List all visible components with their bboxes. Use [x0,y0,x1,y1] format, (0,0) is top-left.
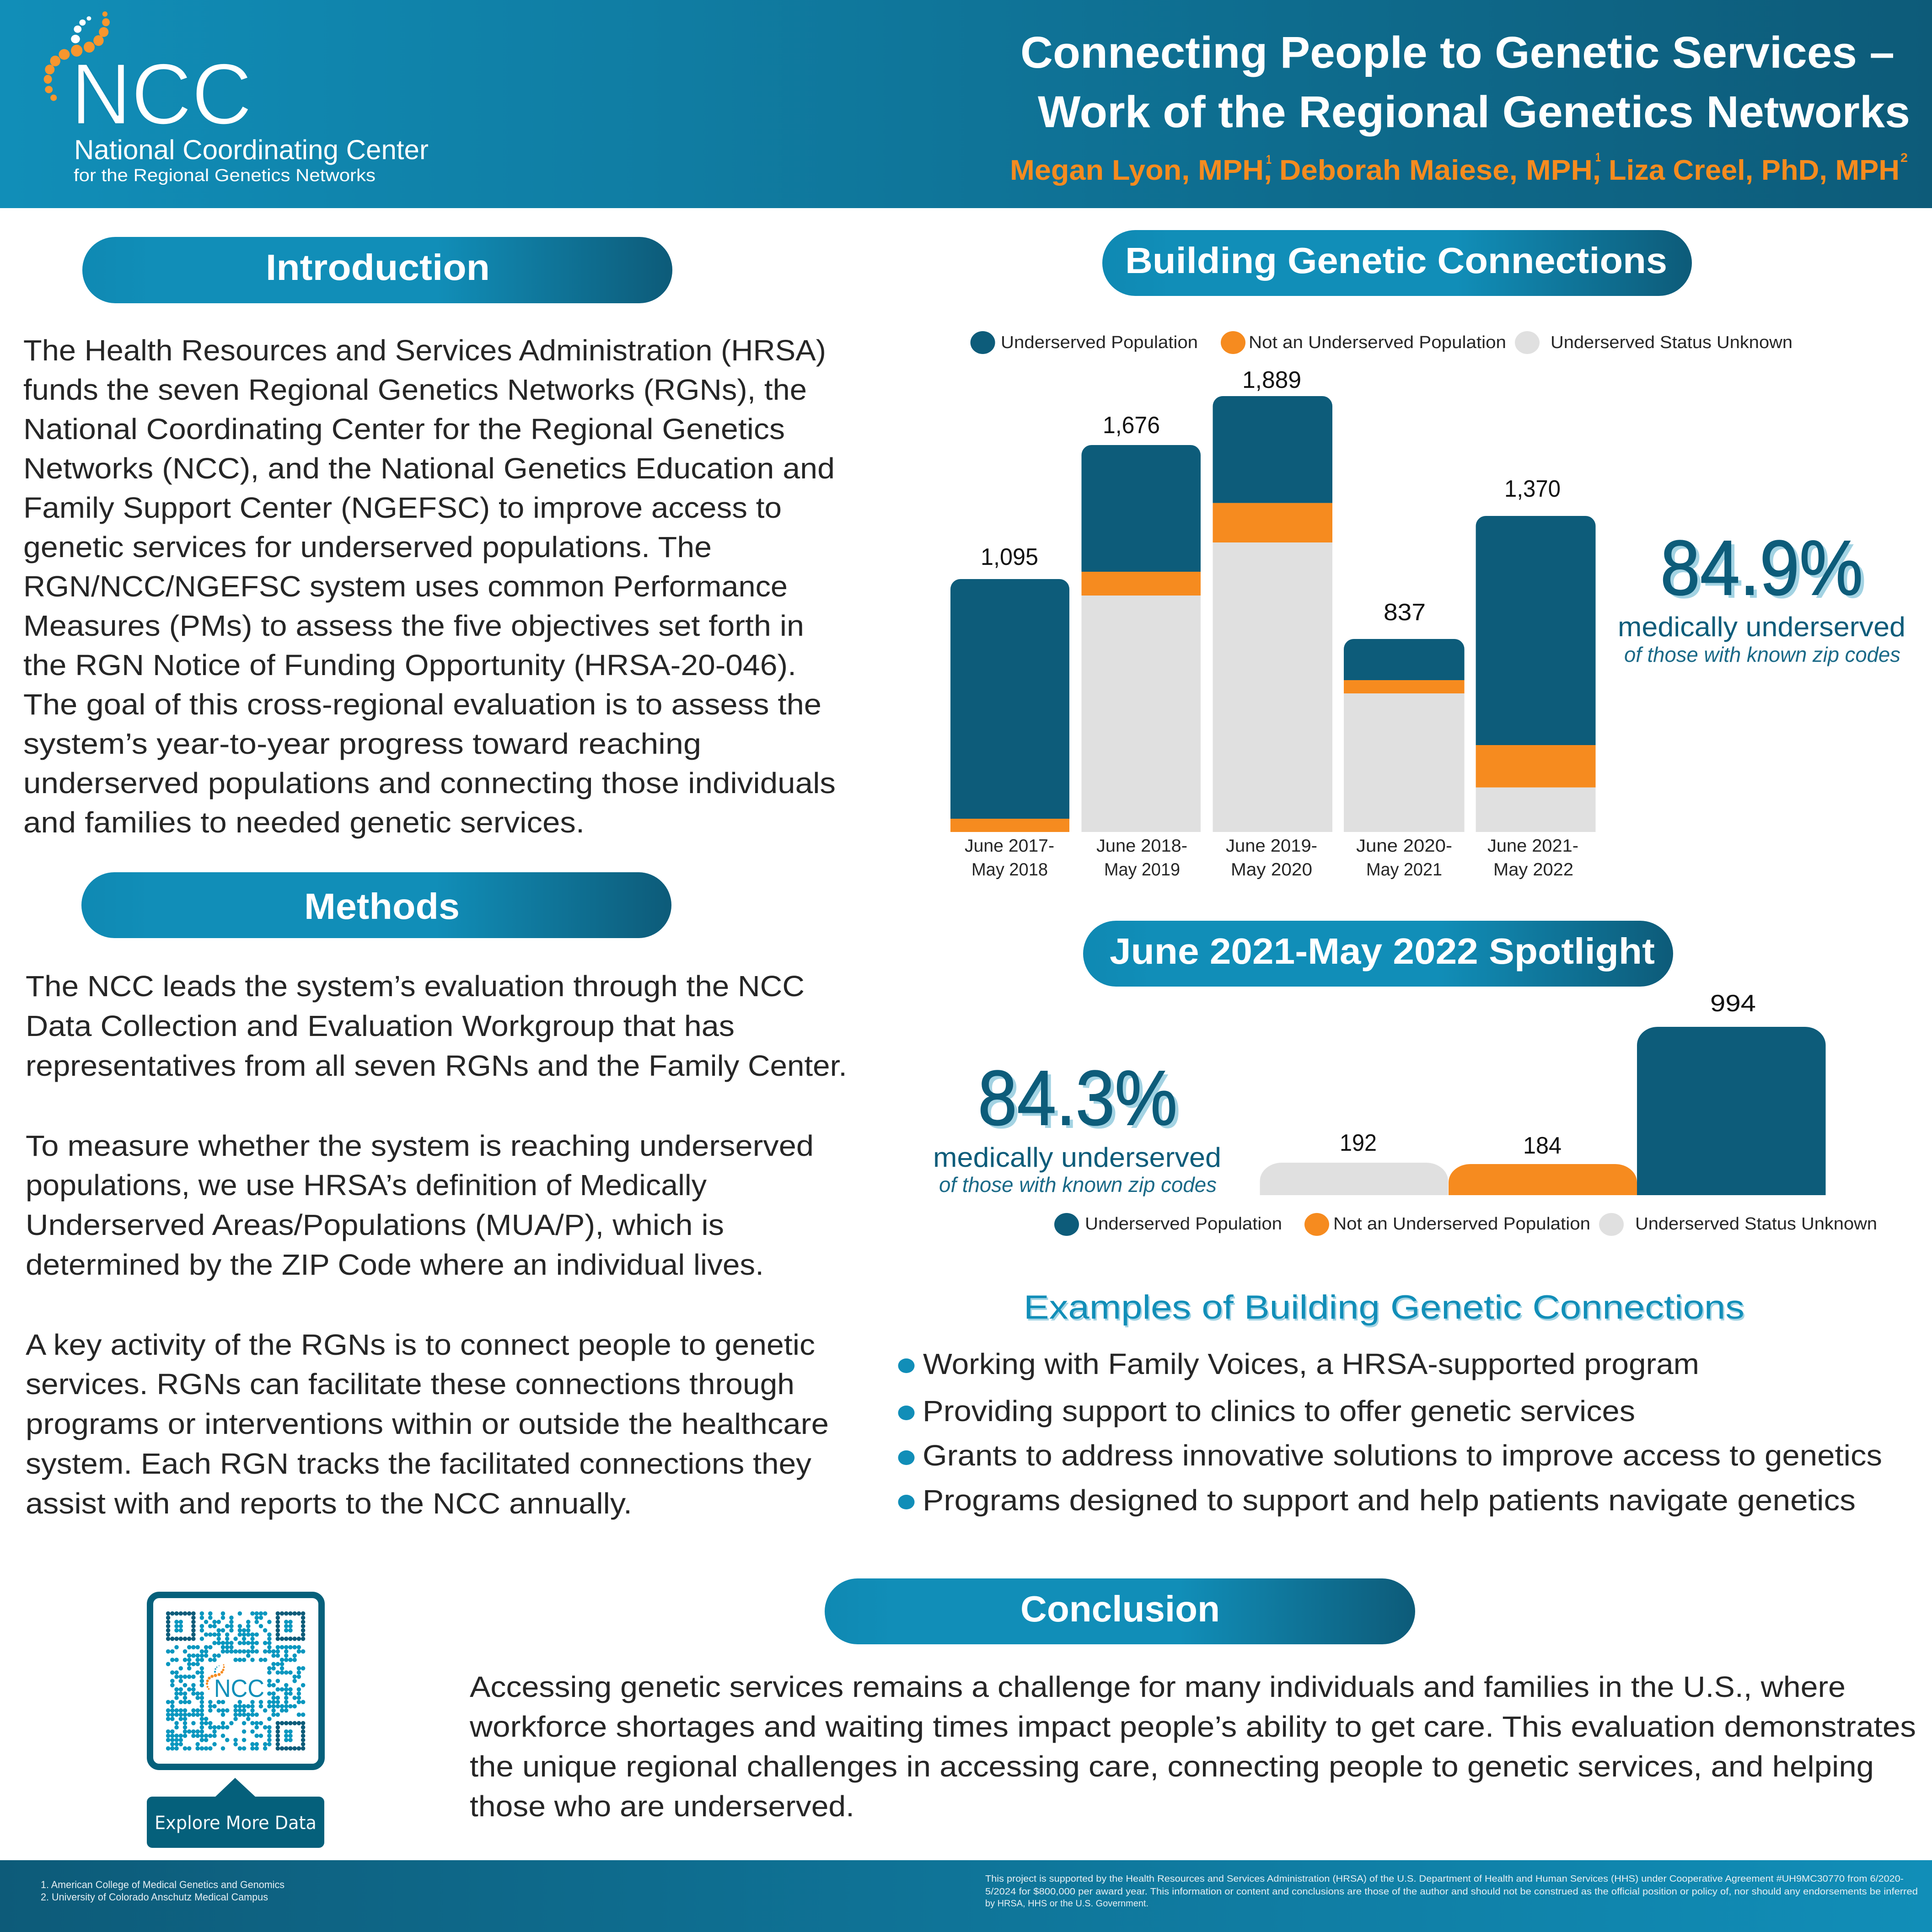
introduction text: Networks (NCC), and the National Genetics Education and [23,452,835,485]
conclusion text: Accessing genetic services remains a challenge for many individuals and families in the U.S., where [470,1670,1846,1703]
introduction heading [82,237,672,303]
conclusion text [469,1670,1916,1823]
spotlight legend: Underserved Status Unknown [1635,1214,1877,1234]
methods text: programs or interventions within or outside the healthcare [26,1407,829,1440]
callout: 84.3% medically underserved: medically underserved [933,1142,1221,1173]
authors: Liza Creel, PhD, MPH [1609,155,1900,186]
building genetic connections heading: Building Genetic Connections [1125,240,1667,281]
bar: June 2021-May 2022 [1476,476,1595,880]
authors: Deborah Maiese, MPH, [1279,155,1601,186]
spotlight legend: Not an Underserved Population [1333,1214,1590,1234]
QR frame [150,1595,322,1767]
callout: 84.9% medically underserved [1618,525,1905,666]
callout: 84.9% medically underserved: of those with known zip codes [1624,643,1900,666]
callout: Explore More Data: Explore More Data [155,1813,317,1834]
chart legend: Underserved Population [1001,333,1198,352]
spotlight heading: June 2021-May 2022 Spotlight [1110,931,1655,971]
QR centre logo [206,1664,264,1702]
methods heading [81,872,671,938]
introduction text: underserved populations and connecting those individuals [23,767,836,800]
introduction text: system’s year-to-year progress toward reaching [23,727,701,760]
conclusion heading: Conclusion [1020,1589,1220,1629]
bar: June 2017-May 2018: May 2018 [971,860,1048,880]
bar: June 2020-May 2021 [1344,599,1465,880]
introduction text: and families to needed genetic services. [23,806,585,839]
bar: June 2017-May 2018: 1,095 [981,544,1038,570]
conclusion text: the unique regional challenges in accessing care, connecting people to genetic services, and helping [470,1750,1874,1783]
conclusion text: workforce shortages and waiting times impact people’s ability to get care. This evaluation demonstrates [469,1710,1916,1743]
bar: June 2019-May 2020: 1,889 [1242,367,1301,393]
methods text: representatives from all seven RGNs and the Family Center. [26,1049,847,1082]
panel: introduction [23,237,836,839]
stacked bar chart [950,367,1595,880]
affiliations: 1. American College of Medical Genetics and Genomics [41,1879,284,1890]
methods text: To measure whether the system is reaching underserved [26,1129,814,1162]
bar: June 2019-May 2020: May 2020 [1231,860,1312,880]
introduction text: The goal of this cross-regional evaluation is to assess the [23,688,821,721]
callout: 84.3% medically underserved: of those with known zip codes [939,1173,1217,1197]
callout: Explore More Data [147,1778,324,1848]
bar: June 2021-May 2022: May 2022 [1493,860,1573,880]
examples list [898,1347,1882,1517]
bar: June 2018-May 2019 [1081,412,1201,880]
methods text: A key activity of the RGNs is to connect people to genetic [26,1328,815,1361]
funding statement: This project is supported by the Health Resources and Services Administration (HRSA) of the U.S. Department of Health and Human Services (HHS) under Cooperative Agreement #UH9MC30770 from 6/2020- [985,1874,1904,1884]
logo tagline: for the Regional Genetics Networks [74,166,376,185]
chart legend: Underserved Status Unknown [1551,333,1792,352]
title: Connecting People to Genetic Services – [1020,27,1894,77]
callout: 84.9% medically underserved: 84.9% [1664,528,1867,615]
callout: 84.9% medically underserved: medically underserved [1618,612,1905,642]
callout: 84.3% medically underserved: 84.3% [982,1058,1181,1145]
authors [1010,150,1908,186]
introduction text: Family Support Center (NGEFSC) to improve access to [23,491,782,524]
spotlight bar chart: 184 [1523,1132,1562,1159]
methods text [26,970,847,1520]
bar: June 2018-May 2019: June 2018- [1096,836,1187,856]
bar: June 2019-May 2020 [1213,367,1332,880]
affiliations [41,1879,284,1903]
bar: June 2019-May 2020: June 2019- [1226,836,1317,856]
examples heading: Examples of Building Genetic Connections [1024,1289,1744,1326]
QR centre logo: NCC [214,1674,264,1702]
authors: Megan Lyon, MPH, [1010,155,1272,186]
spotlight bar chart: 192 [1340,1130,1377,1156]
introduction heading: Introduction [266,247,490,288]
examples list: Programs designed to support and help patients navigate genetics [923,1484,1856,1517]
bar: June 2020-May 2021: June 2020- [1356,836,1452,856]
bar: June 2018-May 2019: 1,676 [1103,412,1160,439]
logo wordmark: NCC [71,46,252,143]
conclusion heading [825,1578,1415,1644]
title: Work of the Regional Genetics Networks [1038,87,1910,137]
building genetic connections heading [1102,230,1692,296]
panel: examples [898,1289,1882,1517]
examples list: Grants to address innovative solutions to improve access to genetics [923,1439,1882,1472]
spotlight heading [1083,921,1673,987]
chart legend [971,331,1792,354]
authors: 1 [1595,150,1601,164]
bar: June 2018-May 2019: May 2019 [1104,860,1180,880]
spotlight legend [1054,1213,1877,1236]
introduction text: Measures (PMs) to assess the five objectives set forth in [23,609,804,642]
conclusion text: those who are underserved. [470,1790,854,1823]
spotlight bar chart: 994 [1710,990,1756,1017]
QR modules [168,1614,303,1749]
spotlight bar chart [1260,990,1826,1195]
methods text: services. RGNs can facilitate these connections through [26,1368,794,1401]
callout: 84.9% medically underserved: 84.9% [1660,525,1863,612]
logo name: National Coordinating Center [74,134,429,165]
panel: building genetic connections [950,230,1905,880]
panel: QR code [147,1595,324,1848]
panel: methods [26,872,847,1520]
bar: June 2017-May 2018: June 2017- [965,836,1054,856]
methods heading: Methods [304,886,460,927]
methods text: Underserved Areas/Populations (MUA/P), which is [26,1208,724,1241]
funding statement: 5/2024 for $800,000 per award year. This information or content and conclusions are those of the author and should not be construed as the official position or policy of, nor should any endorsements be inferred [985,1887,1918,1897]
chart legend: Not an Underserved Population [1249,333,1506,352]
bar: June 2017-May 2018 [950,544,1069,880]
footer banner [0,1860,1932,1932]
methods text: populations, we use HRSA’s definition of Medically [26,1169,707,1202]
methods text: determined by the ZIP Code where an individual lives. [26,1248,764,1281]
introduction text: funds the seven Regional Genetics Networks (RGNs), the [23,373,807,406]
introduction text: genetic services for underserved populations. The [23,531,712,564]
examples list: Working with Family Voices, a HRSA-supported program [923,1347,1699,1380]
title [1020,27,1910,137]
introduction text: the RGN Notice of Funding Opportunity (HRSA-20-046). [23,649,796,682]
authors: 1 [1266,152,1272,166]
callout: 84.3% medically underserved: 84.3% [978,1055,1177,1142]
methods text: assist with and reports to the NCC annually. [26,1487,632,1520]
methods text: system. Each RGN tracks the facilitated connections they [26,1447,811,1480]
logo dots [44,11,110,101]
bar: June 2020-May 2021: May 2021 [1366,860,1442,880]
bar: June 2020-May 2021: 837 [1384,599,1426,626]
introduction text: RGN/NCC/NGEFSC system uses common Performance [23,570,788,603]
bar: June 2021-May 2022: 1,370 [1504,476,1561,502]
methods text: Data Collection and Evaluation Workgroup that has [26,1009,735,1042]
examples list: Providing support to clinics to offer genetic services [923,1395,1635,1428]
logo: NCC [44,11,429,185]
spotlight legend: Underserved Population [1085,1214,1282,1234]
examples heading: Examples of Building Genetic Connections [1025,1291,1746,1328]
introduction text: National Coordinating Center for the Regional Genetics [23,413,785,445]
callout: 84.3% medically underserved [933,1055,1221,1197]
affiliations: 2. University of Colorado Anschutz Medical Campus [41,1891,268,1903]
methods text: The NCC leads the system’s evaluation through the NCC [26,970,805,1003]
introduction text: The Health Resources and Services Administration (HRSA) [23,334,826,367]
funding statement [985,1874,1918,1909]
introduction text [23,334,836,839]
panel: conclusion [469,1578,1916,1823]
funding statement: by HRSA, HHS or the U.S. Government. [985,1899,1148,1909]
panel: spotlight [933,921,1877,1236]
bar: June 2021-May 2022: June 2021- [1487,836,1578,856]
authors: 2 [1900,150,1908,165]
header banner [0,0,1932,208]
